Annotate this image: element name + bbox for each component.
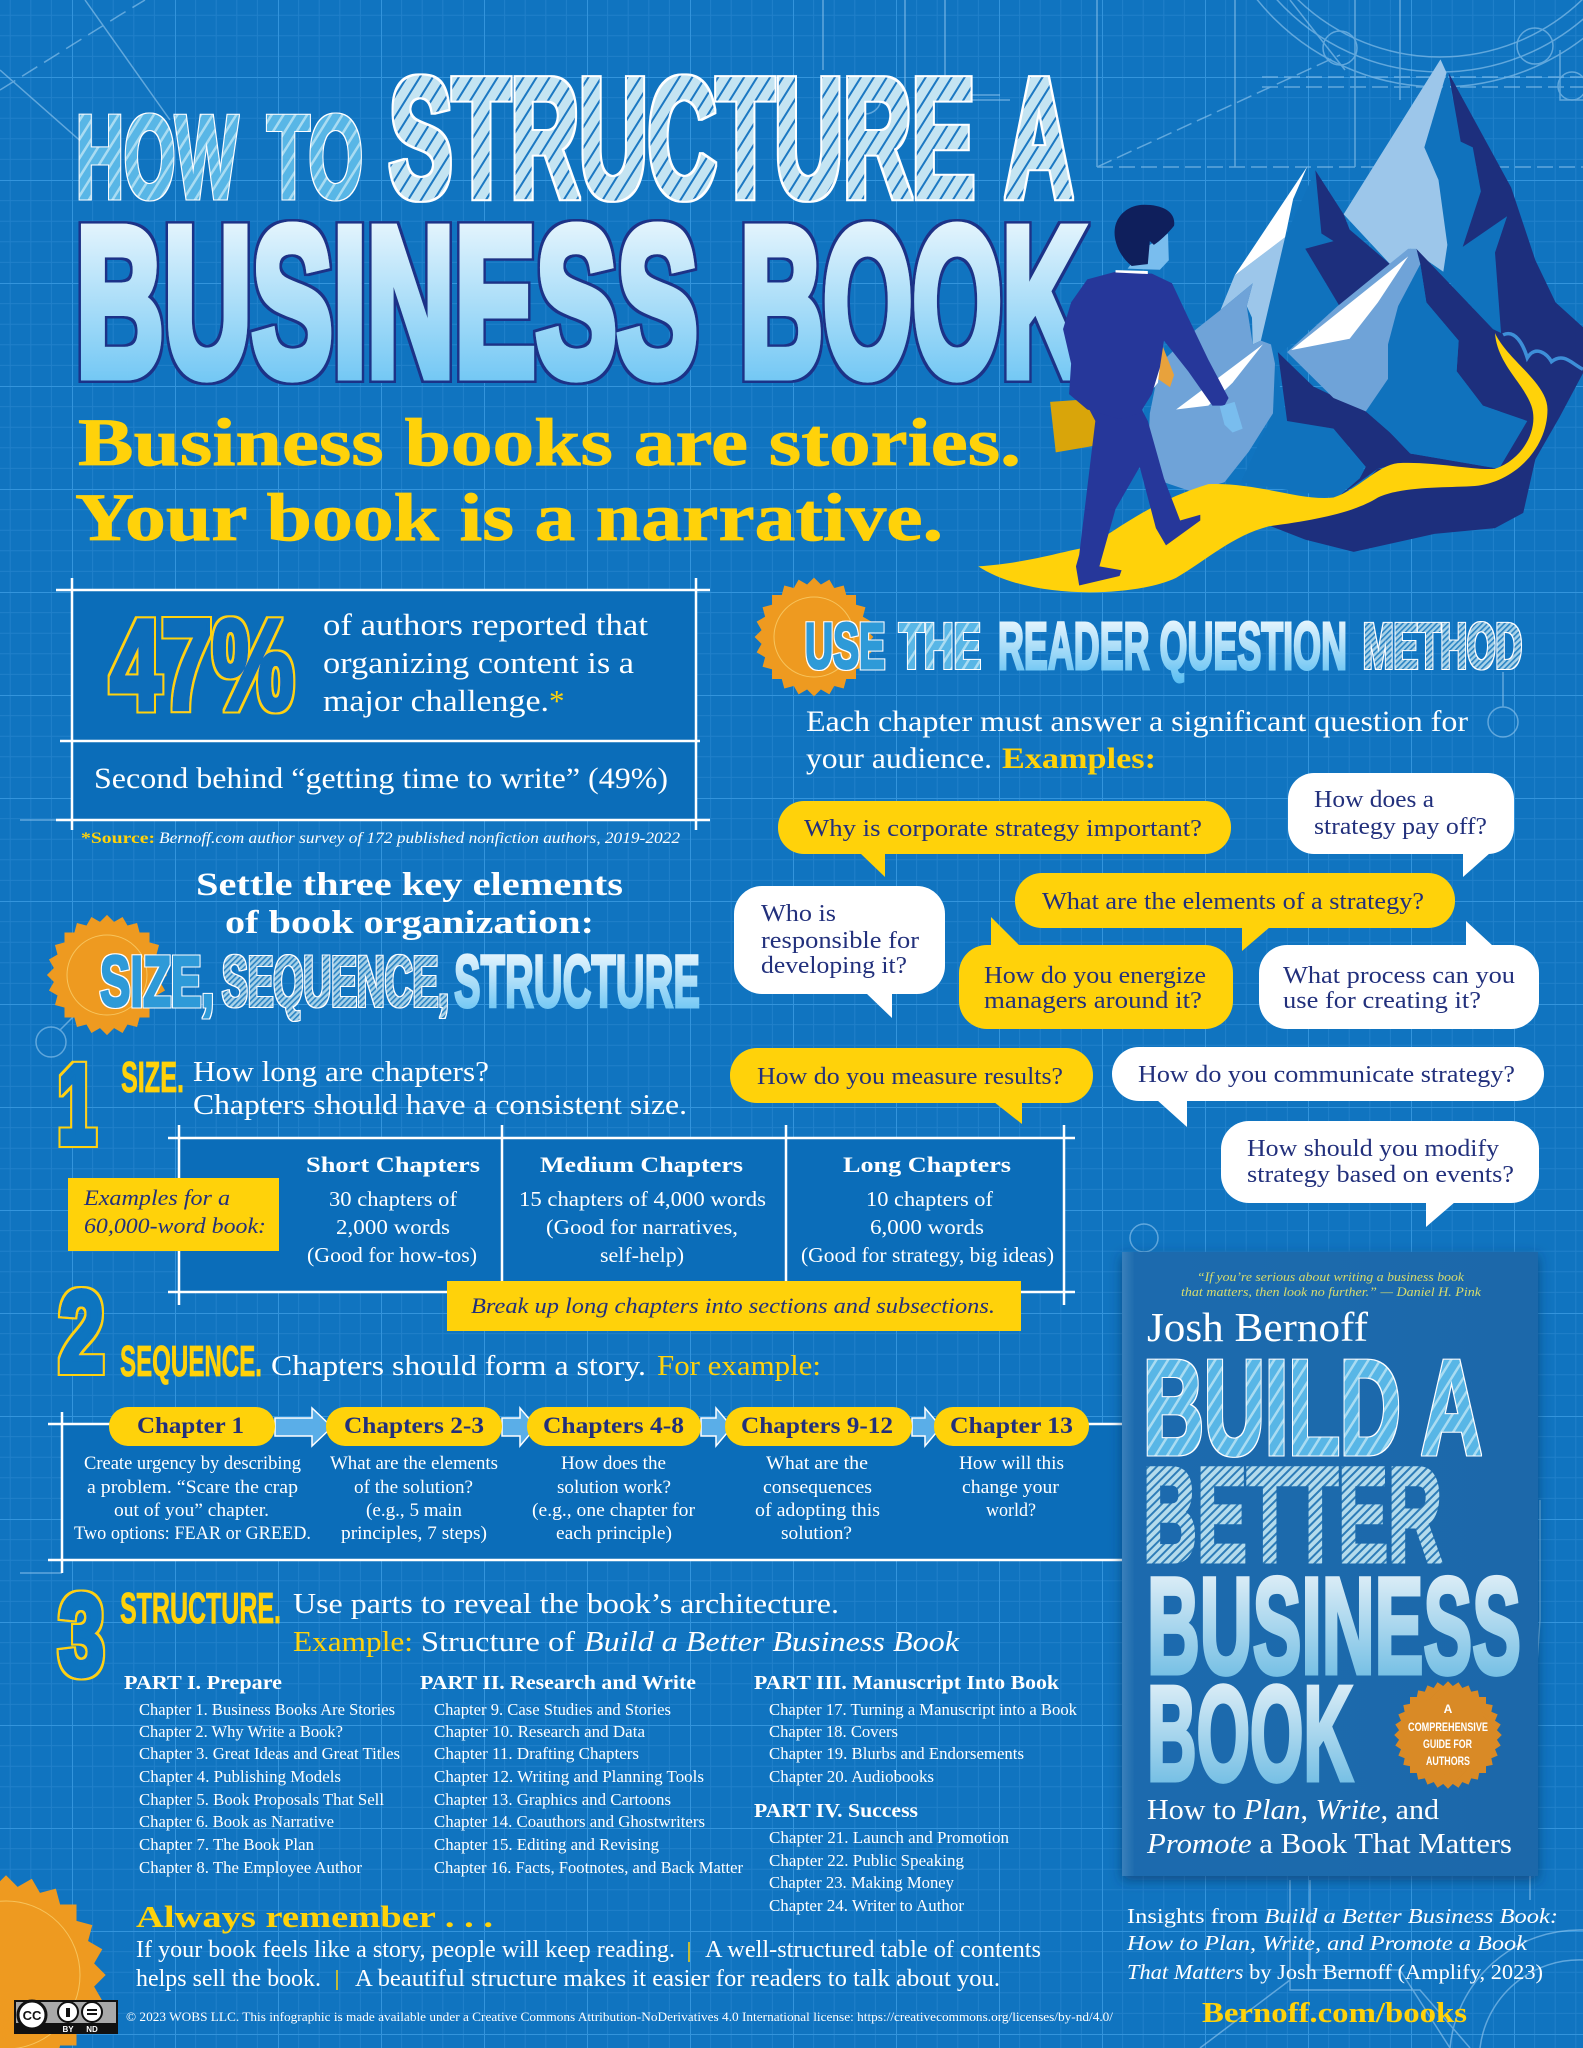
reader question intro text bbox=[806, 705, 1468, 775]
cover seal: GUIDE FOR bbox=[1423, 1737, 1472, 1751]
part III chapter list: Chapter 18. Covers bbox=[769, 1722, 898, 1741]
description: chapters 9-12: of adopting this bbox=[755, 1500, 880, 1521]
book attribution text: How to Plan, Write, and Promote a Book bbox=[1126, 1931, 1528, 1955]
pill: chapters 4-8: Chapters 4-8 bbox=[543, 1413, 684, 1438]
subtitle: Your book is a narrative. bbox=[75, 479, 943, 555]
bubble: how does a strategy pay off bbox=[1288, 773, 1514, 877]
cover seal: A bbox=[1444, 1702, 1453, 1716]
description: chapter 13: world? bbox=[986, 1500, 1036, 1521]
badge: orange seal behind size bbox=[47, 915, 167, 1035]
cover seal: AUTHORS bbox=[1426, 1754, 1470, 1768]
size description: Chapters should have a consistent size. bbox=[193, 1090, 687, 1121]
cover title: BOOK bbox=[1147, 1658, 1353, 1809]
always remember text: helps sell the book. bbox=[136, 1966, 321, 1992]
sequence panel bbox=[48, 1407, 1124, 1573]
pill: chapters 4-8 bbox=[527, 1407, 701, 1446]
bubble: who is responsible: responsible for bbox=[761, 928, 919, 954]
cover subtitle: Promote a Book That Matters bbox=[1146, 1828, 1512, 1860]
pill: chapter 1 bbox=[109, 1407, 275, 1446]
part III chapter list: Chapter 19. Blurbs and Endorsements bbox=[769, 1744, 1024, 1763]
part II chapter list bbox=[420, 1672, 744, 1877]
callout: examples for a 60,000-word book bbox=[68, 1178, 279, 1251]
part II chapter list: Chapter 11. Drafting Chapters bbox=[434, 1744, 639, 1763]
bubble: what process can you use: What process can you bbox=[1283, 963, 1515, 989]
copyright line: © 2023 WOBS LLC. This infographic is made available under a Creative Commons Attribution-NoDerivatives 4.0 International license: https://creativecommons.org/licenses/by-nd/4.0/ bbox=[126, 2009, 1113, 2024]
bubble: how does a strategy pay off: strategy pay off? bbox=[1314, 814, 1487, 840]
part I chapter list: Chapter 4. Publishing Models bbox=[139, 1767, 341, 1786]
mountains bbox=[1148, 59, 1583, 552]
structure description: Use parts to reveal the book’s architecture. bbox=[293, 1589, 839, 1620]
section 3: structure bbox=[59, 1572, 1078, 1915]
column: short chapters bbox=[306, 1152, 481, 1267]
part III chapter list bbox=[754, 1672, 1078, 1786]
badge: orange seal bottom left bbox=[0, 1875, 106, 2048]
arrows between chapters bbox=[275, 1408, 941, 1446]
description: chapter 13 bbox=[959, 1453, 1064, 1521]
cover subtitle bbox=[1146, 1794, 1512, 1860]
cover seal bbox=[1394, 1681, 1502, 1789]
part III chapter list: Chapter 17. Turning a Manuscript into a Book bbox=[769, 1700, 1078, 1719]
briefcase bbox=[1050, 398, 1105, 452]
structure description: Build a Better Business Book bbox=[584, 1627, 960, 1658]
stat description: organizing content is a bbox=[323, 645, 634, 680]
size table bbox=[168, 1125, 1075, 1305]
description: chapter 1: out of you” chapter. bbox=[114, 1500, 269, 1521]
description: chapter 1: a problem. “Scare the crap bbox=[87, 1477, 298, 1498]
bubble: how does a strategy pay off: How does a bbox=[1314, 787, 1434, 813]
part II chapter list: Chapter 14. Coauthors and Ghostwriters bbox=[434, 1812, 705, 1831]
number 3: 3 bbox=[59, 1572, 104, 1699]
part II chapter list: Chapter 12. Writing and Planning Tools bbox=[434, 1767, 704, 1786]
bubble: who is responsible: developing it? bbox=[761, 953, 907, 979]
description: chapters 2-3: principles, 7 steps) bbox=[341, 1523, 487, 1544]
column: long chapters: Long Chapters bbox=[843, 1152, 1012, 1177]
source note: *Source: bbox=[81, 830, 155, 847]
icon: creative commons badge bbox=[14, 2000, 118, 2034]
always remember text: A well-structured table of contents bbox=[705, 1937, 1041, 1963]
panel: 47 percent statistic bbox=[56, 578, 710, 830]
callout: examples for a 60,000-word book: 60,000-word book: bbox=[84, 1213, 266, 1238]
column: medium chapters: (Good for narratives, bbox=[546, 1215, 738, 1239]
cover subtitle: How to Plan, Write, and bbox=[1147, 1794, 1440, 1826]
stat description: of authors reported that bbox=[323, 607, 648, 642]
callout: break up long chapters bbox=[447, 1281, 1021, 1331]
description: chapter 13: change your bbox=[962, 1477, 1060, 1498]
bubble: how should you modify strategy: How should you modify bbox=[1247, 1136, 1499, 1162]
book url: Bernoff.com/books bbox=[1202, 1998, 1467, 2029]
bubble: how do you energize managers bbox=[959, 917, 1233, 1029]
section 2: sequence bbox=[48, 1269, 1124, 1573]
bubble: who is responsible bbox=[734, 886, 945, 1018]
description: chapter 13: How will this bbox=[959, 1453, 1064, 1474]
callout: examples for a 60,000-word book: Examples for a bbox=[83, 1185, 230, 1210]
reader question intro text: your audience. bbox=[806, 742, 992, 775]
subtitle bbox=[75, 404, 1021, 555]
icon: creative commons badge: ND bbox=[86, 2025, 98, 2034]
sequence description: Chapters should form a story. bbox=[271, 1351, 646, 1382]
cover title bbox=[1143, 1332, 1521, 1809]
title bbox=[76, 43, 1085, 420]
column: long chapters: 6,000 words bbox=[870, 1215, 984, 1239]
description: chapters 4-8: each principle) bbox=[556, 1523, 672, 1544]
column: short chapters: (Good for how-tos) bbox=[307, 1243, 477, 1267]
title line: how to structure a: HOW bbox=[76, 91, 238, 224]
source note: Bernoff.com author survey of 172 published nonfiction authors, 2019-2022 bbox=[159, 830, 680, 847]
description: chapters 9-12: consequences bbox=[763, 1477, 872, 1498]
title line: how to structure a: A bbox=[1005, 43, 1073, 234]
part I chapter list: PART I. Prepare bbox=[124, 1672, 282, 1694]
column: short chapters: Short Chapters bbox=[306, 1152, 481, 1177]
bubble: how do you energize managers: managers around it? bbox=[984, 988, 1202, 1014]
bubble: what are the elements of a strategy: What are the elements of a strategy? bbox=[1042, 889, 1424, 915]
part IV chapter list: Chapter 22. Public Speaking bbox=[769, 1851, 964, 1870]
callout: break up long chapters: Break up long chapters into sections and subsections. bbox=[471, 1293, 995, 1318]
cover quote: “If you’re serious about writing a business book bbox=[1197, 1269, 1464, 1284]
column: medium chapters: self-help) bbox=[600, 1243, 684, 1267]
bubble: how do you communicate strategy bbox=[1112, 1047, 1544, 1127]
bubble: who is responsible: Who is bbox=[761, 901, 836, 927]
book attribution text bbox=[1126, 1904, 1558, 1984]
bubble: why is corporate strategy important: Why is corporate strategy important? bbox=[804, 816, 1202, 842]
yellow winding path bbox=[978, 333, 1547, 592]
reader question intro text: Each chapter must answer a significant question for bbox=[806, 705, 1468, 738]
cover author: Josh Bernoff bbox=[1147, 1304, 1368, 1350]
title line: how to structure a: TO bbox=[267, 91, 363, 224]
part I chapter list bbox=[124, 1672, 400, 1877]
part I chapter list: Chapter 2. Why Write a Book? bbox=[139, 1722, 343, 1741]
section 1: size bbox=[58, 1042, 1075, 1331]
part II chapter list: Chapter 10. Research and Data bbox=[434, 1722, 646, 1741]
part IV chapter list: PART IV. Success bbox=[754, 1800, 918, 1822]
part II chapter list: Chapter 16. Facts, Footnotes, and Back Matter bbox=[434, 1858, 744, 1877]
cover seal: COMPREHENSIVE bbox=[1408, 1720, 1488, 1734]
part I chapter list: Chapter 8. The Employee Author bbox=[139, 1858, 362, 1877]
description: chapters 2-3 bbox=[330, 1453, 498, 1544]
column: medium chapters: 15 chapters of 4,000 words bbox=[519, 1187, 766, 1211]
description: chapters 4-8 bbox=[532, 1453, 696, 1544]
heading: use the reader question method: THE bbox=[899, 610, 981, 682]
column: long chapters: (Good for strategy, big ideas) bbox=[801, 1243, 1054, 1267]
bubble: how should you modify strategy: strategy based on events? bbox=[1247, 1162, 1514, 1188]
pill: chapter 13 bbox=[934, 1407, 1089, 1446]
size description: How long are chapters? bbox=[193, 1057, 489, 1088]
column: long chapters bbox=[801, 1152, 1054, 1267]
description: chapters 9-12: What are the bbox=[766, 1453, 868, 1474]
sequence label: SEQUENCE. bbox=[120, 1337, 262, 1386]
heading: use the reader question method: USE bbox=[805, 610, 885, 682]
second place note: Second behind “getting time to write” (49%) bbox=[94, 762, 668, 795]
bubble: what process can you use: use for creating it? bbox=[1283, 988, 1481, 1014]
pill: chapters 2-3: Chapters 2-3 bbox=[344, 1413, 484, 1438]
heading: settle three key elements bbox=[196, 867, 623, 941]
column: short chapters: 2,000 words bbox=[336, 1215, 450, 1239]
bubble: how should you modify strategy bbox=[1221, 1121, 1539, 1227]
always remember text bbox=[136, 1937, 1041, 1992]
part IV chapter list: Chapter 24. Writer to Author bbox=[769, 1896, 965, 1915]
stat description: major challenge. bbox=[323, 683, 549, 718]
part I chapter list: Chapter 3. Great Ideas and Great Titles bbox=[139, 1744, 400, 1763]
part II chapter list: Chapter 15. Editing and Revising bbox=[434, 1835, 659, 1854]
speech bubbles: example questions bbox=[730, 773, 1544, 1227]
reader question intro text: Examples: bbox=[1002, 742, 1156, 775]
structure label: STRUCTURE. bbox=[120, 1584, 281, 1633]
description: chapters 2-3: of the solution? bbox=[354, 1477, 473, 1498]
description: chapter 1: Two options: FEAR or GREED. bbox=[74, 1523, 311, 1544]
bubble: how do you measure results bbox=[730, 1048, 1093, 1124]
bubble: how do you measure results: How do you measure results? bbox=[757, 1064, 1063, 1090]
icon: creative commons badge: CC bbox=[23, 2008, 42, 2023]
badge: orange seal behind use bbox=[755, 578, 873, 696]
heading: use the reader question method bbox=[805, 609, 1522, 684]
structure description bbox=[293, 1589, 960, 1658]
book attribution text: That Matters by Josh Bernoff (Amplify, 2023) bbox=[1127, 1960, 1543, 1984]
businessman bbox=[1063, 205, 1243, 586]
heading: size, sequence, structure: SEQUENCE, bbox=[222, 943, 449, 1022]
number 2: 2 bbox=[59, 1269, 104, 1396]
description: chapters 4-8: (e.g., one chapter for bbox=[532, 1500, 696, 1521]
sequence description: For example: bbox=[657, 1351, 821, 1382]
part III chapter list: PART III. Manuscript Into Book bbox=[754, 1672, 1060, 1694]
heading: settle three key elements: Settle three key elements bbox=[196, 867, 623, 903]
stat description bbox=[323, 607, 648, 718]
description: chapters 4-8: How does the bbox=[561, 1453, 666, 1474]
title line: how to structure a: STRUCTURE bbox=[389, 43, 975, 234]
pill: chapters 2-3 bbox=[326, 1407, 502, 1446]
bubble: how do you energize managers: How do you energize bbox=[984, 963, 1206, 989]
part II chapter list: Chapter 9. Case Studies and Stories bbox=[434, 1700, 671, 1719]
description: chapters 4-8: solution work? bbox=[557, 1477, 671, 1498]
always remember text: If your book feels like a story, people will keep reading. bbox=[136, 1937, 675, 1963]
part IV chapter list bbox=[754, 1800, 1009, 1915]
heading: size, sequence, structure bbox=[100, 940, 700, 1023]
bubble: why is corporate strategy important bbox=[778, 801, 1231, 877]
heading: size, sequence, structure: STRUCTURE bbox=[454, 940, 700, 1023]
always remember heading: Always remember . . . bbox=[136, 1899, 493, 1934]
cover quote bbox=[1181, 1269, 1481, 1299]
part III chapter list: Chapter 20. Audiobooks bbox=[769, 1767, 934, 1786]
part I chapter list: Chapter 6. Book as Narrative bbox=[139, 1812, 334, 1831]
pill: chapter 13: Chapter 13 bbox=[950, 1413, 1073, 1438]
book cover bbox=[1122, 1252, 1538, 1876]
book attribution text: Insights from Build a Better Business Book: bbox=[1127, 1904, 1558, 1928]
number 1: 1 bbox=[58, 1042, 96, 1167]
cover quote: that matters, then look no further.” — Daniel H. Pink bbox=[1181, 1284, 1481, 1299]
subtitle: Business books are stories. bbox=[78, 404, 1021, 480]
description: chapter 1: Create urgency by describing bbox=[84, 1453, 301, 1474]
icon: creative commons badge: BY bbox=[62, 2025, 74, 2034]
title line: business book: BOOK bbox=[740, 183, 1085, 420]
bubble: how do you communicate strategy: How do you communicate strategy? bbox=[1138, 1062, 1515, 1088]
heading: size, sequence, structure: SIZE, bbox=[100, 943, 214, 1022]
description: chapters 9-12: solution? bbox=[781, 1523, 852, 1544]
bubble: what process can you use bbox=[1259, 921, 1539, 1029]
pill: chapter 1: Chapter 1 bbox=[137, 1413, 244, 1438]
illustration: businessman walking toward mountains bbox=[978, 59, 1583, 592]
description: chapters 9-12 bbox=[755, 1453, 880, 1544]
column: medium chapters bbox=[519, 1152, 766, 1267]
part IV chapter list: Chapter 21. Launch and Promotion bbox=[769, 1828, 1009, 1847]
structure description: Structure of bbox=[421, 1627, 576, 1658]
pill: chapters 9-12: Chapters 9-12 bbox=[741, 1413, 893, 1438]
part II chapter list: PART II. Research and Write bbox=[420, 1672, 696, 1694]
stat number: 47% bbox=[110, 594, 294, 737]
column: short chapters: 30 chapters of bbox=[329, 1187, 457, 1211]
stat description: * bbox=[549, 683, 564, 718]
title line: how to structure a bbox=[76, 43, 1073, 234]
structure description: Example: bbox=[293, 1627, 413, 1658]
heading: settle three key elements: of book organization: bbox=[225, 905, 594, 941]
part I chapter list: Chapter 7. The Book Plan bbox=[139, 1835, 314, 1854]
part II chapter list: Chapter 13. Graphics and Cartoons bbox=[434, 1790, 671, 1809]
column: long chapters: 10 chapters of bbox=[866, 1187, 993, 1211]
column: medium chapters: Medium Chapters bbox=[540, 1152, 744, 1177]
always remember text: A beautiful structure makes it easier for readers to talk about you. bbox=[355, 1966, 1000, 1992]
pill: chapters 9-12 bbox=[725, 1407, 912, 1446]
part I chapter list: Chapter 1. Business Books Are Stories bbox=[139, 1700, 395, 1719]
size description bbox=[193, 1057, 687, 1121]
description: chapters 2-3: (e.g., 5 main bbox=[366, 1500, 462, 1521]
sequence description bbox=[271, 1351, 821, 1382]
description: chapters 2-3: What are the elements bbox=[330, 1453, 498, 1474]
description: chapter 1 bbox=[74, 1453, 311, 1544]
title line: business book: BUSINESS bbox=[76, 183, 698, 420]
part I chapter list: Chapter 5. Book Proposals That Sell bbox=[139, 1790, 384, 1809]
bubble: what are the elements of a strategy bbox=[1015, 873, 1455, 951]
part IV chapter list: Chapter 23. Making Money bbox=[769, 1873, 955, 1892]
size label: SIZE. bbox=[121, 1053, 184, 1102]
